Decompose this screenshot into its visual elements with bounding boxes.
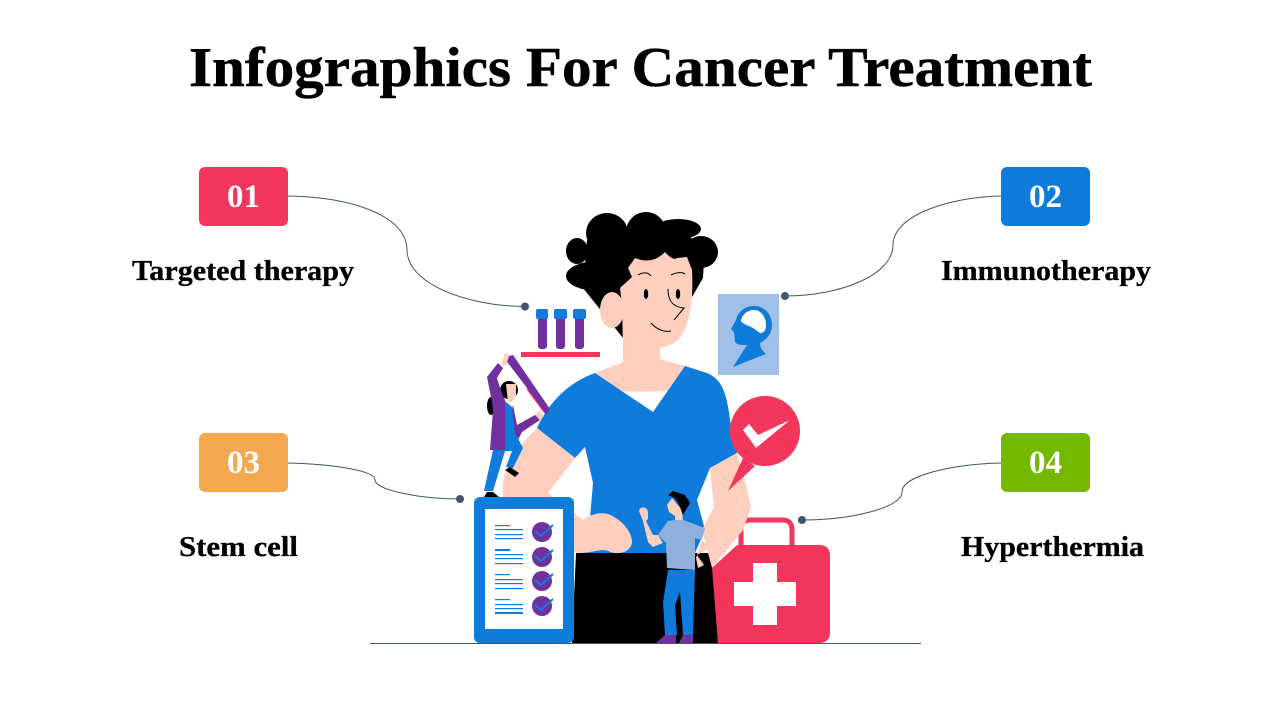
hair xyxy=(566,212,718,338)
trousers xyxy=(663,570,695,635)
badge 04: 04 xyxy=(1029,445,1062,481)
badge 02: 02 xyxy=(1029,179,1062,215)
icon: checklist clipboard xyxy=(474,497,574,643)
trousers xyxy=(572,553,718,643)
hair xyxy=(668,491,690,515)
shirt and trousers xyxy=(484,401,523,491)
right arm xyxy=(702,453,751,568)
ear xyxy=(600,292,624,328)
arms and head xyxy=(639,507,663,547)
label: Hyperthermia: Hyperthermia xyxy=(961,532,1144,563)
illustration: central figure xyxy=(503,212,737,643)
connector: 04 xyxy=(798,463,1001,524)
badge 03: 03 xyxy=(227,445,260,481)
label: Stem cell: Stem cell xyxy=(179,532,298,563)
facial features xyxy=(638,273,685,331)
label: Targeted therapy: Targeted therapy xyxy=(132,256,354,287)
icon: first aid kit xyxy=(712,520,830,643)
hair xyxy=(487,381,518,415)
connector: 03 xyxy=(288,463,464,502)
face xyxy=(620,252,692,348)
label: Immunotherapy: Immunotherapy xyxy=(941,256,1151,287)
check marks xyxy=(532,522,553,616)
badge 04 xyxy=(1001,433,1090,492)
magnifier xyxy=(507,355,550,415)
badge 03 xyxy=(199,433,288,492)
coat xyxy=(487,363,505,450)
badge 01: 01 xyxy=(227,179,260,215)
hands xyxy=(502,353,509,367)
badge 02 xyxy=(1001,167,1090,226)
icon: head profile card xyxy=(718,294,779,375)
title: Infographics For Cancer Treatment xyxy=(189,37,1092,99)
icon: test tubes xyxy=(521,309,600,357)
shoes xyxy=(484,467,519,497)
connector: 01 xyxy=(288,196,528,310)
undershirt xyxy=(617,390,677,412)
figure: woman with magnifier xyxy=(484,353,550,497)
neck and chest xyxy=(595,340,685,412)
left arm xyxy=(503,428,632,553)
face xyxy=(506,384,516,402)
badge 01 xyxy=(199,167,288,226)
shoes xyxy=(656,635,693,643)
ground line xyxy=(370,642,921,644)
icon: speech bubble with check xyxy=(728,396,800,491)
figure: man waving xyxy=(639,491,710,643)
shirt xyxy=(537,366,737,553)
connector: 02 xyxy=(782,196,1001,300)
checklist text lines xyxy=(495,525,523,614)
shirt xyxy=(658,520,705,570)
